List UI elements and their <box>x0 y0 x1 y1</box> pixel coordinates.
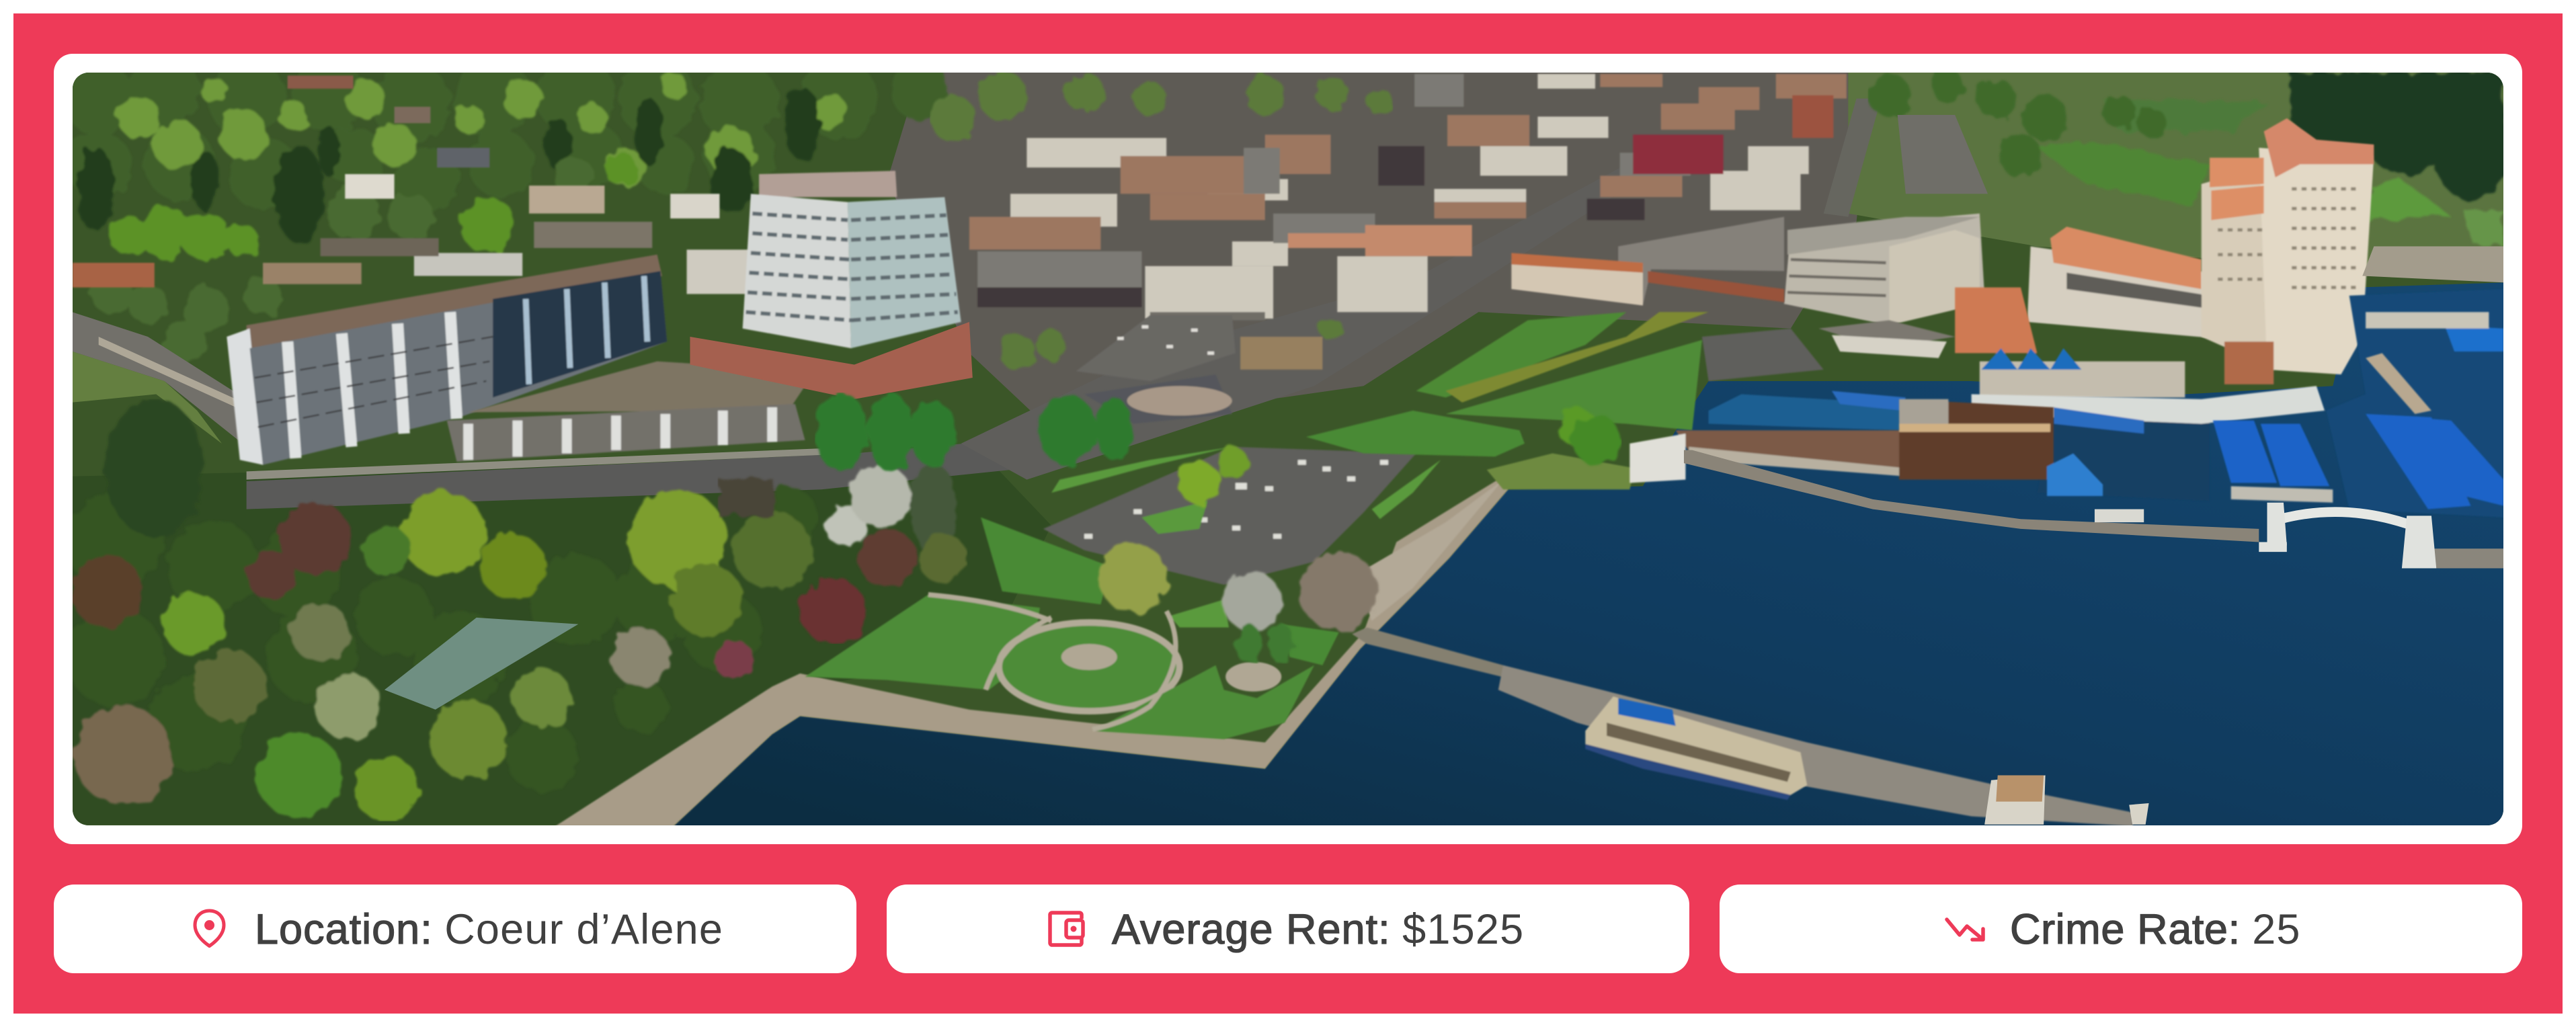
stat pill: location <box>54 885 856 973</box>
building by road and pale blossom trees <box>718 463 967 644</box>
round building and nearby store <box>1084 337 1322 423</box>
brick podium of tower <box>690 322 973 399</box>
white high-rise tower <box>743 171 961 348</box>
location text: Location: Coeur d’Alene <box>255 906 723 953</box>
aerial photo of Coeur d'Alene waterfront <box>73 73 2503 825</box>
average rent text: Average Rent: $1525 <box>1112 906 1524 953</box>
downtown parking lot with cars <box>1076 315 1236 381</box>
low wing of apartment complex <box>447 362 815 462</box>
curved road on left <box>73 312 243 444</box>
beach shore behind resort <box>2362 247 2503 282</box>
parkway trees <box>815 393 1621 663</box>
wharf pier in foreground <box>1352 628 2136 826</box>
red-tile civic building <box>1511 217 1784 306</box>
parking lot behind resort <box>1898 115 1988 194</box>
land base <box>73 73 2503 826</box>
conifers and resort grounds <box>1868 69 2512 247</box>
icon: wallet <box>1048 911 1085 947</box>
blue marina boat covers <box>2213 312 2503 509</box>
floating boardwalk to arch bridge <box>1684 450 2503 569</box>
tour boat at pier <box>1585 696 1807 800</box>
park lawns and walking paths <box>805 518 1339 739</box>
main road along the waterfront <box>247 440 1027 509</box>
icon: trending down arrow <box>1945 917 1985 942</box>
large apartment block <box>227 255 667 465</box>
white photo card <box>54 54 2522 844</box>
resort tower <box>2202 118 2374 384</box>
north street <box>1824 99 1881 217</box>
lake water <box>674 282 2503 826</box>
waterfront parking lot <box>1043 447 1441 585</box>
downtown buildings <box>969 74 1847 321</box>
residential trees upper left <box>63 54 950 363</box>
city lawns with tree row <box>1306 312 1824 489</box>
stat pill: crime rate <box>1720 885 2522 973</box>
parking garage <box>1784 214 1984 325</box>
Resort waterfront hotel low block <box>2027 227 2254 341</box>
crime rate text: Crime Rate: 25 <box>2010 906 2301 953</box>
houses among the trees <box>73 75 756 294</box>
downtown diagonal street <box>961 164 1643 480</box>
kiosk at end of pier <box>1984 775 2149 825</box>
basketball court <box>385 618 578 710</box>
small bay and marina water <box>1709 289 2503 518</box>
lower left park trees <box>66 399 818 821</box>
hotel entrance canopy and blue roof restaurant <box>1818 288 2185 397</box>
icon: map pin <box>194 909 226 948</box>
stat pill: average rent <box>887 885 1689 973</box>
street trees downtown <box>930 71 1393 371</box>
paved shoreline promenade <box>555 477 1508 826</box>
pier restaurant and timber decks <box>1629 399 2103 496</box>
